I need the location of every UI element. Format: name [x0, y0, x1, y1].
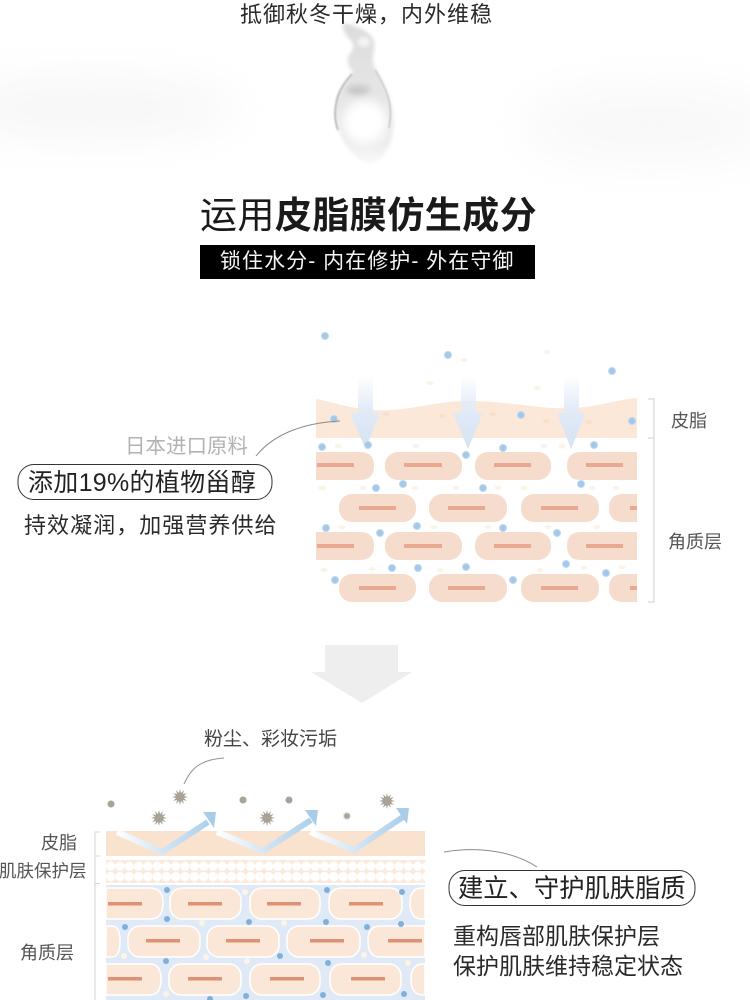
subtitle bar: 锁住水分- 内在修护- 外在守御	[220, 250, 514, 273]
callout: build barrier lipids: 建立、守护肌肤脂质	[458, 875, 686, 903]
arrows: moisture penetrating	[350, 375, 586, 449]
label: stratum corneum: 角质层	[20, 943, 74, 963]
text: imported ingredient: 日本进口原料	[125, 435, 248, 458]
diagram: skin structure after	[106, 789, 425, 1000]
leader line	[256, 421, 340, 456]
callout: plant sterol: 添加19%的植物甾醇	[28, 469, 256, 497]
label: sebum: 皮脂	[671, 411, 707, 431]
label: protective layer: 肌肤保护层	[0, 861, 86, 881]
arrowheads	[203, 808, 409, 828]
dust particles	[108, 789, 395, 826]
bracket: lower diagram layers	[95, 832, 100, 1000]
arrow: large down	[311, 645, 412, 703]
background: soft grey mist	[0, 82, 750, 163]
sebum layer	[316, 398, 637, 438]
corneum background	[106, 885, 425, 1000]
heading: top tagline: 抵御秋冬干燥，内外维稳	[240, 2, 493, 27]
label: stratum corneum: 角质层	[668, 532, 722, 552]
moisture droplets	[318, 332, 636, 584]
text: nourishing description: 持效凝润，加强营养供给	[24, 513, 278, 538]
diagram: skin structure before	[316, 332, 637, 602]
corneocyte bricks	[106, 888, 425, 995]
label: sebum: 皮脂	[41, 833, 77, 853]
corneocyte bricks	[316, 452, 637, 602]
brick nuclei	[108, 902, 422, 980]
subtitle bar	[200, 245, 535, 279]
sebum layer	[106, 831, 425, 856]
title: 运用皮脂膜仿生成分	[200, 195, 537, 236]
lipid specks	[318, 350, 626, 572]
text: rebuild description: 保护肌肤维持稳定状态	[453, 953, 683, 979]
brick nuclei	[317, 463, 637, 590]
text: rebuild description: 重构唇部肌肤保护层	[453, 923, 660, 949]
leader line	[184, 758, 224, 784]
pale droplets	[121, 889, 411, 997]
arrows: barrier deflecting	[117, 817, 403, 852]
label: dust and makeup: 粉尘、彩妆污垢	[204, 728, 337, 750]
blue droplets	[122, 887, 407, 1000]
icon: water droplet	[335, 23, 393, 164]
text: rebuild description	[453, 923, 683, 979]
protective layer	[106, 860, 425, 883]
leader line	[444, 850, 537, 867]
bracket: upper diagram layers	[648, 399, 654, 602]
